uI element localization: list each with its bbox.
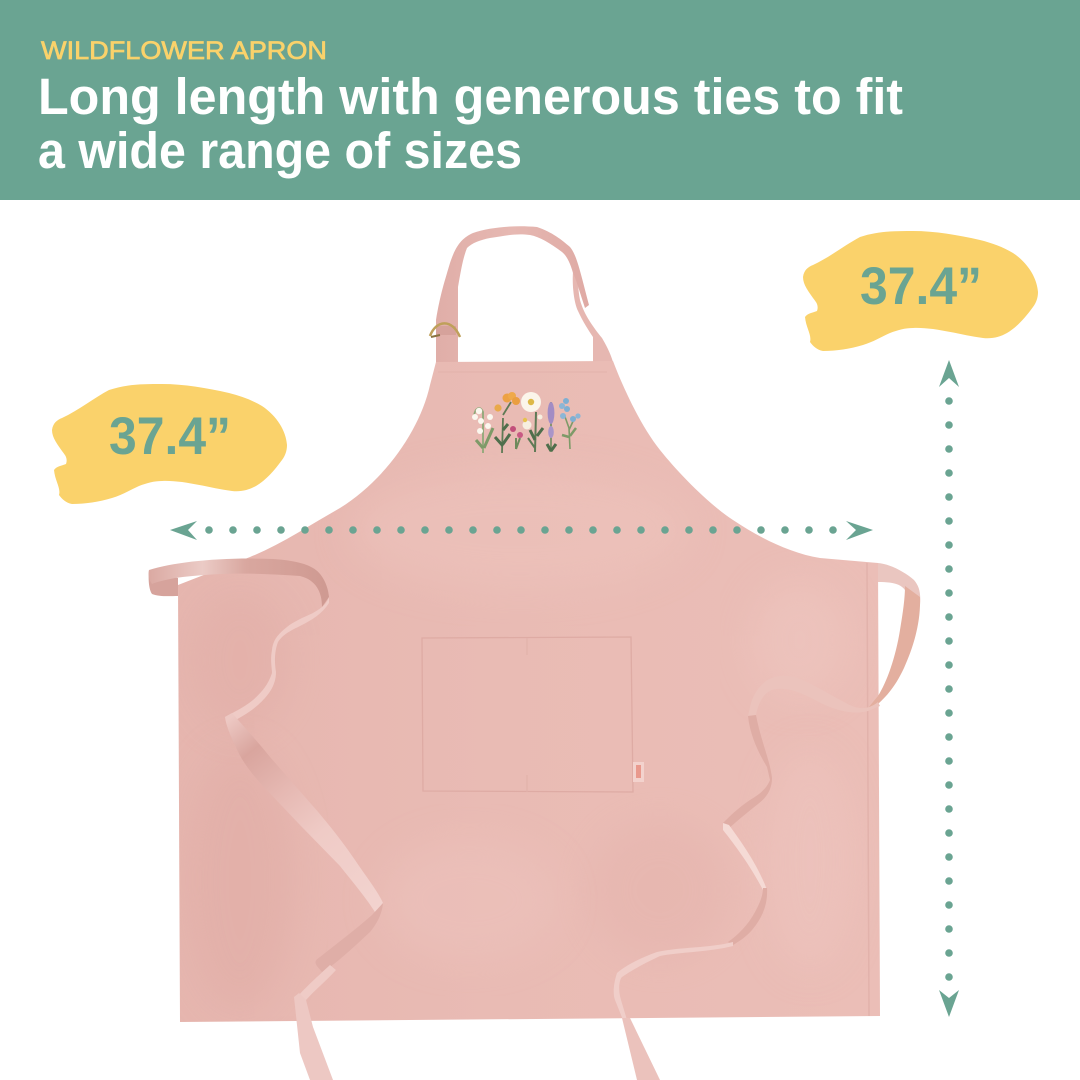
apron illustration bbox=[149, 226, 920, 1080]
header banner bbox=[0, 0, 1080, 200]
neck strap bbox=[436, 226, 613, 362]
heading line 1: Long length with generous ties to fit bbox=[38, 68, 903, 125]
buckle bbox=[430, 323, 460, 337]
flower: daisies bbox=[521, 392, 543, 452]
left waist tie bbox=[149, 559, 383, 1080]
right waist tie bbox=[614, 563, 920, 1080]
value: 37.4 inches: 37.4” bbox=[109, 407, 231, 466]
flower: forget-me-nots bbox=[559, 398, 581, 449]
flower: lily of the valley bbox=[472, 408, 493, 453]
vertical dimension arrow: length bbox=[939, 360, 959, 1017]
flower: lavender bbox=[547, 402, 556, 452]
value: 37.4 inches: 37.4” bbox=[860, 257, 982, 316]
eyebrow: product name: WILDFLOWER APRON bbox=[41, 37, 327, 65]
horizontal dimension arrow: width bbox=[170, 521, 873, 540]
pocket bbox=[422, 637, 633, 792]
apron body bbox=[178, 361, 880, 1022]
heading line 2: a wide range of sizes bbox=[38, 122, 522, 179]
flower: orange poppies bbox=[494, 392, 520, 453]
callout: length measurement bbox=[803, 231, 1038, 351]
flower: small thistles bbox=[510, 426, 523, 449]
pocket label tag bbox=[633, 762, 644, 782]
embroidered wildflowers bbox=[472, 392, 581, 453]
callout: width measurement bbox=[52, 384, 287, 504]
